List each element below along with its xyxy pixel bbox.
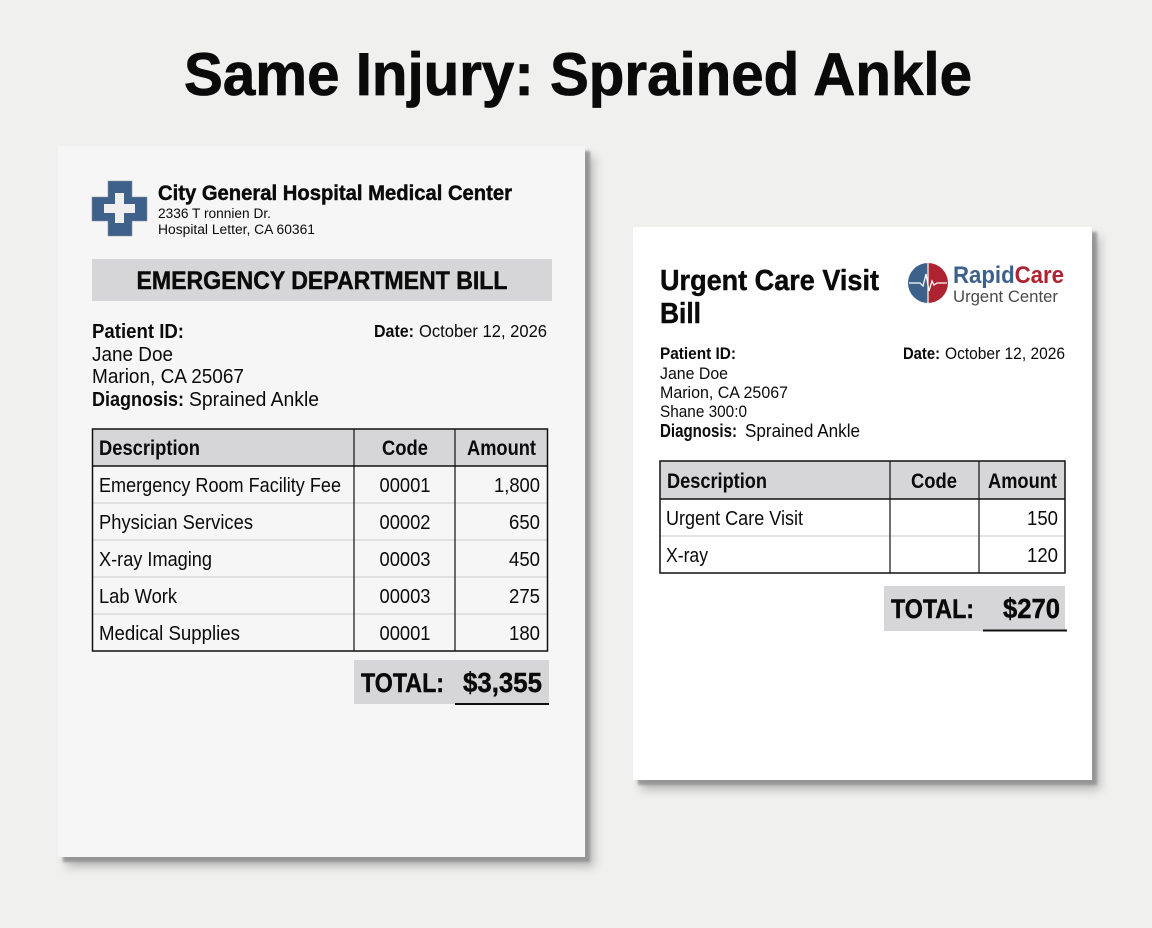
hospital name and address: Hospital Letter, CA 60361 bbox=[158, 222, 315, 237]
total: emergency: $3,355 bbox=[463, 667, 542, 698]
patient details: Sprained Ankle bbox=[745, 421, 860, 441]
panel: urgent care bill bbox=[633, 227, 1100, 790]
table: urgent care charges: Description bbox=[667, 470, 767, 493]
table: urgent care charges: 150 bbox=[1027, 507, 1058, 530]
panel: emergency department bill bbox=[58, 146, 594, 867]
total: urgent care: TOTAL: bbox=[891, 594, 974, 624]
table: emergency charges: 275 bbox=[509, 585, 540, 608]
bill heading: Bill bbox=[660, 298, 701, 330]
table: emergency charges: 00003 bbox=[380, 548, 430, 571]
total: emergency bbox=[354, 660, 549, 704]
table: emergency charges: 450 bbox=[509, 548, 540, 571]
table: urgent care charges: Urgent Care Visit bbox=[666, 507, 803, 530]
table: emergency charges: 180 bbox=[509, 622, 540, 645]
table: emergency charges: X-ray Imaging bbox=[99, 548, 212, 571]
bill date: October 12, 2026 bbox=[945, 344, 1065, 363]
hospital name and address: 2336 T ronnien Dr. bbox=[158, 206, 271, 221]
table: emergency charges: 00001 bbox=[380, 474, 430, 497]
bill date: October 12, 2026 bbox=[419, 321, 547, 341]
table: emergency charges: 1,800 bbox=[494, 474, 540, 497]
bill heading bbox=[92, 259, 552, 301]
icon: hospital cross bbox=[92, 181, 147, 236]
title: Same Injury: Sprained Ankle bbox=[184, 41, 972, 108]
table: urgent care charges: Code bbox=[911, 470, 957, 493]
patient details: Jane Doe bbox=[92, 344, 173, 366]
table: urgent care charges: X-ray bbox=[666, 544, 709, 567]
table: urgent care charges: 120 bbox=[1027, 544, 1058, 567]
patient details: Patient ID: bbox=[92, 321, 184, 343]
table: emergency charges: 650 bbox=[509, 511, 540, 534]
bill date: Date: bbox=[903, 344, 940, 363]
table: emergency charges: Emergency Room Facility Fee bbox=[99, 474, 341, 497]
table: emergency charges: Physician Services bbox=[99, 511, 253, 534]
table: emergency charges: 00003 bbox=[380, 585, 430, 608]
table: emergency charges: Amount bbox=[467, 437, 536, 460]
table: emergency charges: Medical Supplies bbox=[99, 622, 240, 645]
hospital name and address bbox=[158, 182, 512, 237]
bill heading bbox=[660, 265, 879, 330]
table: emergency charges bbox=[92, 429, 548, 651]
total: emergency: TOTAL: bbox=[361, 668, 444, 698]
table: emergency charges: 00001 bbox=[380, 622, 430, 645]
bill heading: EMERGENCY DEPARTMENT BILL bbox=[136, 267, 508, 295]
logo: RapidCare bbox=[908, 262, 1064, 306]
patient details: Marion, CA 25067 bbox=[660, 383, 788, 402]
patient details bbox=[92, 321, 319, 411]
patient details: Diagnosis: bbox=[660, 421, 737, 441]
hospital name and address: City General Hospital Medical Center bbox=[158, 182, 512, 205]
table: emergency charges: Lab Work bbox=[99, 585, 178, 608]
patient details: Shane 300:0 bbox=[660, 402, 747, 421]
patient details: Diagnosis: bbox=[92, 389, 184, 411]
logo: RapidCare: RapidCare bbox=[953, 262, 1064, 289]
table: urgent care charges: Amount bbox=[988, 470, 1057, 493]
patient details: Jane Doe bbox=[660, 364, 728, 383]
table: emergency charges: 00002 bbox=[380, 511, 430, 534]
bill heading: Urgent Care Visit bbox=[660, 265, 879, 297]
patient details: Sprained Ankle bbox=[189, 389, 319, 411]
patient details: Marion, CA 25067 bbox=[92, 366, 244, 388]
bill date: Date: bbox=[374, 321, 414, 341]
table: emergency charges: Code bbox=[382, 437, 428, 460]
table: urgent care charges bbox=[660, 461, 1065, 573]
bill date bbox=[903, 344, 1065, 363]
patient details bbox=[660, 344, 860, 441]
table: emergency charges: Description bbox=[99, 437, 200, 460]
total: urgent care: $270 bbox=[1003, 593, 1060, 624]
patient details: Patient ID: bbox=[660, 344, 736, 363]
total: urgent care bbox=[884, 586, 1067, 631]
logo: RapidCare: Urgent Center bbox=[953, 287, 1058, 306]
